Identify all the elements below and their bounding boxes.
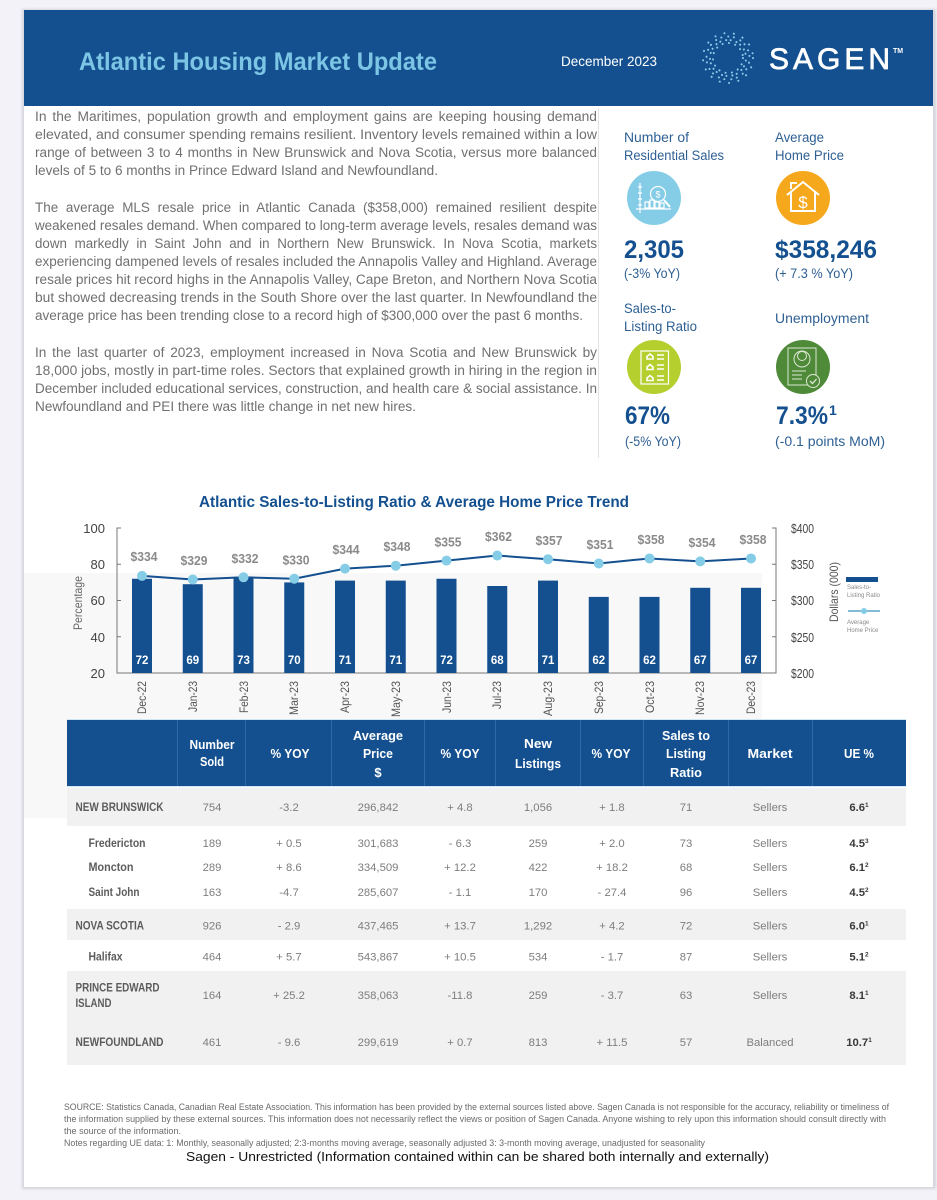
right axis title: Dollars (000) bbox=[827, 562, 841, 622]
header banner bbox=[24, 10, 933, 106]
month labels: Apr-23 bbox=[338, 681, 352, 713]
row: Halifax: Sellers bbox=[753, 952, 788, 964]
row: Moncton: Sellers bbox=[753, 862, 788, 874]
price labels: $330 bbox=[282, 552, 310, 568]
bar values: 71 bbox=[542, 655, 555, 667]
row: Prince Edward Island: -11.8 bbox=[448, 990, 472, 1002]
legend bbox=[846, 577, 881, 634]
table header: Sold bbox=[200, 754, 224, 769]
row: Newfoundland: 1 bbox=[868, 1037, 872, 1044]
bar values: 72 bbox=[136, 655, 148, 667]
row: Fredericton: Fredericton bbox=[88, 836, 146, 850]
legend: Average bbox=[847, 620, 870, 626]
paragraph 2: The average MLS resale price in Atlantic Canada ($358,000) remained resilient despite bbox=[35, 200, 597, 215]
left axis title: Percentage bbox=[73, 576, 85, 630]
classification notice: Sagen - Unrestricted (Information contained within can be shared both internally and externally) bbox=[186, 1149, 769, 1164]
row: Nova Scotia: 1,292 bbox=[524, 920, 552, 932]
paragraph 2: average price has been trending close to a record high of $300,000 over the past 6 months. bbox=[35, 308, 583, 323]
row: Moncton: + 8.6 bbox=[276, 862, 302, 874]
row: Nova Scotia bbox=[76, 918, 869, 932]
right axis labels: $200 bbox=[791, 666, 814, 681]
icon: resume with check bbox=[776, 340, 830, 394]
paragraph 2: weakened resales demand. When compared to long-term average levels, resales demand was bbox=[34, 218, 597, 233]
bar values: 72 bbox=[440, 655, 453, 667]
row: Halifax: 87 bbox=[680, 952, 692, 964]
right axis labels bbox=[791, 521, 814, 681]
table header: % YOY bbox=[592, 746, 631, 761]
stat: number of residential sales: (-3% YoY) bbox=[624, 266, 680, 281]
left axis labels: 40 bbox=[91, 630, 105, 645]
table header bbox=[67, 719, 906, 787]
row: Halifax: 2 bbox=[865, 952, 869, 958]
legend: Sales-to- bbox=[847, 585, 871, 591]
paragraph 3: Newfoundland and PEI there was little change in net new hires. bbox=[35, 399, 416, 414]
source notes: the information supplied by these external sources. This information does not necessarily reflect the views or position of Sagen Canada. Anyone wishing to rely upon this information should consult directly with bbox=[64, 1114, 886, 1124]
row: Newfoundland: NEWFOUNDLAND bbox=[76, 1035, 164, 1049]
row: Moncton: 289 bbox=[203, 862, 221, 874]
trademark: TM bbox=[893, 48, 903, 55]
month labels bbox=[135, 681, 758, 717]
row: Moncton: 6.1 bbox=[849, 862, 865, 874]
price labels: $332 bbox=[232, 551, 258, 566]
price labels: $357 bbox=[536, 533, 562, 548]
price labels: $362 bbox=[485, 529, 512, 544]
row: Nova Scotia: 926 bbox=[203, 920, 221, 932]
row: Nova Scotia: + 13.7 bbox=[444, 920, 476, 932]
row: New Brunswick bbox=[76, 800, 869, 814]
row: Newfoundland: 299,619 bbox=[358, 1037, 398, 1049]
paragraph 3: December included educational services, construction, and health care & social assistance. In bbox=[35, 381, 597, 396]
row: Moncton: 334,509 bbox=[358, 862, 398, 874]
row: Nova Scotia: NOVA SCOTIA bbox=[76, 918, 144, 932]
row: Newfoundland: 57 bbox=[680, 1037, 692, 1049]
row: Prince Edward Island: 63 bbox=[680, 990, 692, 1002]
stat: number of residential sales: Number of bbox=[624, 130, 689, 145]
icon: house with dollar bbox=[776, 171, 830, 225]
stat: number of residential sales: 2,305 bbox=[624, 236, 684, 264]
stat: sales-to-listing ratio bbox=[624, 301, 697, 449]
row: Halifax: 543,867 bbox=[358, 952, 398, 964]
right axis labels: $400 bbox=[791, 521, 814, 536]
stat: unemployment: (-0.1 points MoM) bbox=[775, 434, 885, 449]
row: Newfoundland: - 9.6 bbox=[278, 1037, 300, 1049]
row: Saint John: 4.5 bbox=[849, 887, 865, 899]
month labels: Nov-23 bbox=[693, 681, 707, 715]
stat: average home price: $358,246 bbox=[775, 236, 877, 264]
bars bbox=[132, 577, 761, 673]
price labels: $344 bbox=[332, 542, 360, 557]
row: New Brunswick: NEW BRUNSWICK bbox=[76, 800, 164, 814]
paragraph 3: In the last quarter of 2023, employment increased in Nova Scotia and New Brunswick by bbox=[35, 345, 597, 360]
price labels: $334 bbox=[130, 549, 158, 564]
table header: New bbox=[524, 736, 553, 751]
paragraph 3: 18,000 jobs, mostly in part-time roles. Sectors that explained growth in hiring in the region in bbox=[35, 363, 597, 378]
row: Halifax: Halifax bbox=[88, 950, 123, 964]
row: Prince Edward Island bbox=[76, 980, 869, 1010]
row: Halifax: - 1.7 bbox=[601, 952, 623, 964]
row: Nova Scotia: 6.0 bbox=[849, 920, 865, 932]
row: Halifax: 5.1 bbox=[849, 952, 865, 964]
paragraph 2: experiencing dampened levels of resales included the Annapolis Valley and Highland. Average bbox=[35, 254, 597, 269]
table header: UE % bbox=[844, 746, 874, 761]
icon: property checklist bbox=[627, 340, 681, 394]
stat: number of residential sales: Residential Sales bbox=[624, 148, 724, 163]
icon: chart with magnifier bbox=[627, 171, 681, 225]
month labels: Jun-23 bbox=[440, 681, 454, 713]
paragraph 1: levels of 5 to 6 months in Prince Edward Island and Newfoundland. bbox=[35, 163, 438, 178]
date: December 2023 bbox=[561, 54, 657, 69]
stat: average home price: Home Price bbox=[775, 148, 844, 163]
stat: average home price: Average bbox=[775, 130, 824, 145]
table header: Ratio bbox=[670, 765, 702, 780]
price line bbox=[142, 556, 751, 580]
legend: Listing Ratio bbox=[847, 593, 881, 599]
row: New Brunswick: + 4.8 bbox=[447, 802, 473, 814]
table header: % YOY bbox=[440, 746, 480, 761]
row: New Brunswick: Sellers bbox=[753, 802, 788, 814]
row: Saint John: 163 bbox=[203, 887, 221, 899]
price labels: $348 bbox=[384, 539, 410, 554]
stat: number of residential sales bbox=[624, 130, 724, 281]
month labels: Jul-23 bbox=[490, 681, 504, 709]
row: Halifax: + 10.5 bbox=[444, 952, 476, 964]
row: Fredericton bbox=[88, 836, 869, 850]
left axis labels: 80 bbox=[91, 557, 105, 572]
row: Moncton: 422 bbox=[529, 862, 547, 874]
price labels: $358 bbox=[740, 532, 766, 547]
row: Prince Edward Island: PRINCE EDWARD bbox=[76, 980, 160, 994]
chart title: Atlantic Sales-to-Listing Ratio & Average Home Price Trend bbox=[199, 494, 629, 511]
icon: chart with magnifier: $ bbox=[655, 190, 661, 200]
month labels: Dec-23 bbox=[744, 681, 758, 714]
icon: house with dollar: $ bbox=[798, 193, 808, 212]
month labels: Oct-23 bbox=[643, 681, 657, 713]
table header: Market bbox=[748, 746, 793, 761]
row: Fredericton: 3 bbox=[865, 838, 869, 845]
bar values: 69 bbox=[186, 655, 199, 667]
bar values: 71 bbox=[339, 655, 352, 667]
row: Fredericton: 189 bbox=[203, 838, 221, 850]
month labels: Sep-23 bbox=[592, 681, 606, 714]
row: Saint John: Sellers bbox=[753, 887, 788, 899]
month labels: Dec-22 bbox=[135, 681, 149, 714]
row: Saint John: 2 bbox=[865, 887, 869, 894]
row: Fredericton: Sellers bbox=[753, 838, 788, 850]
source notes: SOURCE: Statistics Canada, Canadian Real Estate Association. This information has been provided by the external sources listed above. Sagen Canada is not responsible for the accuracy, reliability or timeliness of bbox=[64, 1102, 889, 1112]
row: New Brunswick: 296,842 bbox=[358, 802, 398, 814]
paragraph 3 bbox=[35, 345, 597, 414]
title: Atlantic Housing Market Update bbox=[79, 48, 437, 76]
bar values: 68 bbox=[491, 655, 504, 667]
row: New Brunswick: + 1.8 bbox=[599, 802, 625, 814]
left axis labels bbox=[83, 521, 105, 681]
row: Newfoundland: 461 bbox=[203, 1037, 221, 1049]
row: Prince Edward Island: + 25.2 bbox=[273, 990, 305, 1002]
table header: Listings bbox=[515, 756, 561, 771]
paragraph 2: resale prices hit record highs in the Annapolis Valley, Cape Breton, and Northern Nova Scotia bbox=[35, 272, 597, 287]
row: Fredericton: - 6.3 bbox=[449, 838, 471, 850]
row: Moncton: 2 bbox=[865, 862, 869, 869]
price markers bbox=[137, 551, 756, 584]
row: Fredericton: 4.5 bbox=[849, 838, 865, 850]
row: Prince Edward Island: ISLAND bbox=[76, 996, 112, 1010]
row: Moncton: + 12.2 bbox=[444, 862, 476, 874]
left axis labels: 100 bbox=[83, 521, 105, 536]
row: Prince Edward Island: 259 bbox=[529, 990, 547, 1002]
bar values: 73 bbox=[237, 655, 250, 667]
right axis labels: $250 bbox=[791, 630, 814, 645]
panel: key statistics bbox=[598, 108, 885, 458]
table header: $ bbox=[374, 765, 382, 780]
paragraph 1: In the Maritimes, population growth and employment gains are keeping housing demand bbox=[35, 109, 597, 124]
row: Saint John: -4.7 bbox=[279, 887, 299, 899]
stat: unemployment: 7.3% bbox=[776, 402, 828, 430]
stat: unemployment: 1 bbox=[829, 402, 837, 418]
row: Saint John: 170 bbox=[529, 887, 547, 899]
price labels: $329 bbox=[180, 553, 208, 568]
row: Halifax: 534 bbox=[529, 952, 547, 964]
row: Saint John: Saint John bbox=[88, 885, 140, 899]
row: Nova Scotia: 437,465 bbox=[358, 920, 398, 932]
source notes: Notes regarding UE data: 1: Monthly, seasonally adjusted; 2:3-months moving average, seasonally adjusted 3: 3-month moving average, unadjusted for seasonality bbox=[64, 1138, 705, 1148]
row: New Brunswick: 1 bbox=[865, 802, 869, 809]
row: Nova Scotia: Sellers bbox=[753, 920, 788, 932]
logo: Sagen dotted ring bbox=[703, 33, 753, 83]
row: Saint John: - 1.1 bbox=[449, 887, 471, 899]
row: Fredericton: 301,683 bbox=[358, 838, 398, 850]
bar values: 70 bbox=[288, 655, 301, 667]
table header: Number bbox=[190, 737, 234, 752]
row: Newfoundland: + 11.5 bbox=[597, 1037, 627, 1049]
paragraph 2: down markedly in Saint John and in Northern New Brunswick. In Nova Scotia, markets bbox=[35, 236, 597, 251]
price labels: $354 bbox=[688, 535, 716, 550]
table header: Sales to bbox=[662, 728, 710, 743]
chart: sales-to-listing ratio and price trend bbox=[73, 521, 881, 717]
row: Saint John bbox=[88, 885, 869, 899]
row: Moncton: 68 bbox=[680, 862, 692, 874]
paragraph 2 bbox=[34, 200, 597, 323]
price labels bbox=[130, 529, 766, 568]
source notes bbox=[64, 1102, 889, 1148]
row: Halifax bbox=[88, 950, 869, 964]
row: Newfoundland: 813 bbox=[529, 1037, 547, 1049]
intro text bbox=[34, 109, 597, 414]
month labels: Feb-23 bbox=[237, 681, 251, 713]
row: Saint John: 96 bbox=[680, 887, 692, 899]
left axis labels: 20 bbox=[91, 666, 105, 681]
price labels: $355 bbox=[434, 534, 462, 550]
logo wordmark: SAGEN bbox=[769, 43, 890, 76]
price labels: $351 bbox=[586, 537, 614, 552]
bar values: 62 bbox=[592, 655, 605, 667]
row: Nova Scotia: 72 bbox=[680, 920, 692, 932]
row: Moncton: + 18.2 bbox=[596, 862, 628, 874]
table header: % YOY bbox=[270, 746, 310, 761]
row: New Brunswick: 6.6 bbox=[849, 802, 865, 814]
row: Prince Edward Island: 358,063 bbox=[358, 990, 398, 1002]
paragraph 1 bbox=[35, 109, 597, 178]
source notes: the source of the information. bbox=[64, 1126, 181, 1136]
row: New Brunswick: 71 bbox=[680, 802, 692, 814]
stat: sales-to-listing ratio: (-5% YoY) bbox=[625, 434, 681, 449]
month labels: Aug-23 bbox=[541, 681, 555, 716]
left axis labels: 60 bbox=[91, 593, 105, 608]
row: Moncton bbox=[88, 860, 869, 874]
row: Fredericton: + 2.0 bbox=[599, 838, 625, 850]
legend: Home Price bbox=[847, 628, 879, 634]
table header: Price bbox=[363, 746, 393, 761]
right axis labels: $300 bbox=[791, 593, 814, 608]
bar values: 67 bbox=[694, 655, 707, 667]
bar values: 62 bbox=[643, 655, 656, 667]
row: Prince Edward Island: 164 bbox=[203, 990, 221, 1002]
table header: Listing bbox=[666, 746, 706, 761]
month labels: Mar-23 bbox=[287, 681, 301, 715]
stat: sales-to-listing ratio: Listing Ratio bbox=[624, 319, 697, 334]
row: New Brunswick: 754 bbox=[203, 802, 221, 814]
paragraph 1: range of between 3 to 4 months in New Brunswick and Nova Scotia, versus more balanced bbox=[35, 145, 597, 160]
row: Fredericton: 259 bbox=[529, 838, 547, 850]
row: Newfoundland: 10.7 bbox=[846, 1037, 868, 1049]
row: Saint John: - 27.4 bbox=[598, 887, 626, 899]
row: Prince Edward Island: 1 bbox=[865, 990, 869, 997]
row: Nova Scotia: - 2.9 bbox=[278, 920, 300, 932]
row bands bbox=[67, 788, 906, 1065]
price labels: $358 bbox=[638, 532, 664, 547]
row: Saint John: 285,607 bbox=[358, 887, 398, 899]
bar values: 71 bbox=[389, 655, 403, 667]
row: Halifax: 464 bbox=[203, 952, 221, 964]
row: Halifax: + 5.7 bbox=[276, 952, 302, 964]
row: Newfoundland bbox=[76, 1035, 872, 1049]
stat: sales-to-listing ratio: 67% bbox=[625, 402, 670, 430]
row: Moncton: Moncton bbox=[88, 860, 134, 874]
row: Newfoundland: + 0.7 bbox=[447, 1037, 473, 1049]
stat: unemployment: Unemployment bbox=[775, 311, 869, 326]
row: Prince Edward Island: Sellers bbox=[753, 990, 788, 1002]
month labels: May-23 bbox=[389, 681, 403, 717]
table header: Average bbox=[353, 728, 403, 743]
table: market data by province bbox=[67, 719, 906, 1065]
row: Nova Scotia: 1 bbox=[865, 920, 869, 928]
stat: average home price: (+ 7.3 % YoY) bbox=[775, 266, 853, 281]
stat: sales-to-listing ratio: Sales-to- bbox=[624, 301, 676, 316]
row: Prince Edward Island: - 3.7 bbox=[601, 990, 623, 1002]
paragraph 2: but showed decreasing trends in the South Shore over the last quarter. In Newfoundland the bbox=[35, 290, 597, 305]
stat: average home price bbox=[775, 130, 877, 281]
row: Fredericton: 73 bbox=[680, 838, 692, 850]
row: New Brunswick: -3.2 bbox=[279, 802, 299, 814]
row: Newfoundland: Balanced bbox=[746, 1037, 794, 1049]
bar values bbox=[136, 655, 757, 667]
stat: unemployment bbox=[775, 311, 885, 449]
right axis labels: $350 bbox=[791, 557, 814, 572]
row: New Brunswick: 1,056 bbox=[524, 802, 552, 814]
row: Prince Edward Island: 8.1 bbox=[849, 990, 865, 1002]
row: Fredericton: + 0.5 bbox=[276, 838, 302, 850]
bar values: 67 bbox=[745, 655, 757, 667]
row: Nova Scotia: + 4.2 bbox=[599, 920, 625, 932]
month labels: Jan-23 bbox=[186, 681, 200, 712]
paragraph 1: elevated, and consumer spending remains resilient. Inventory levels remained within a low bbox=[35, 127, 597, 142]
